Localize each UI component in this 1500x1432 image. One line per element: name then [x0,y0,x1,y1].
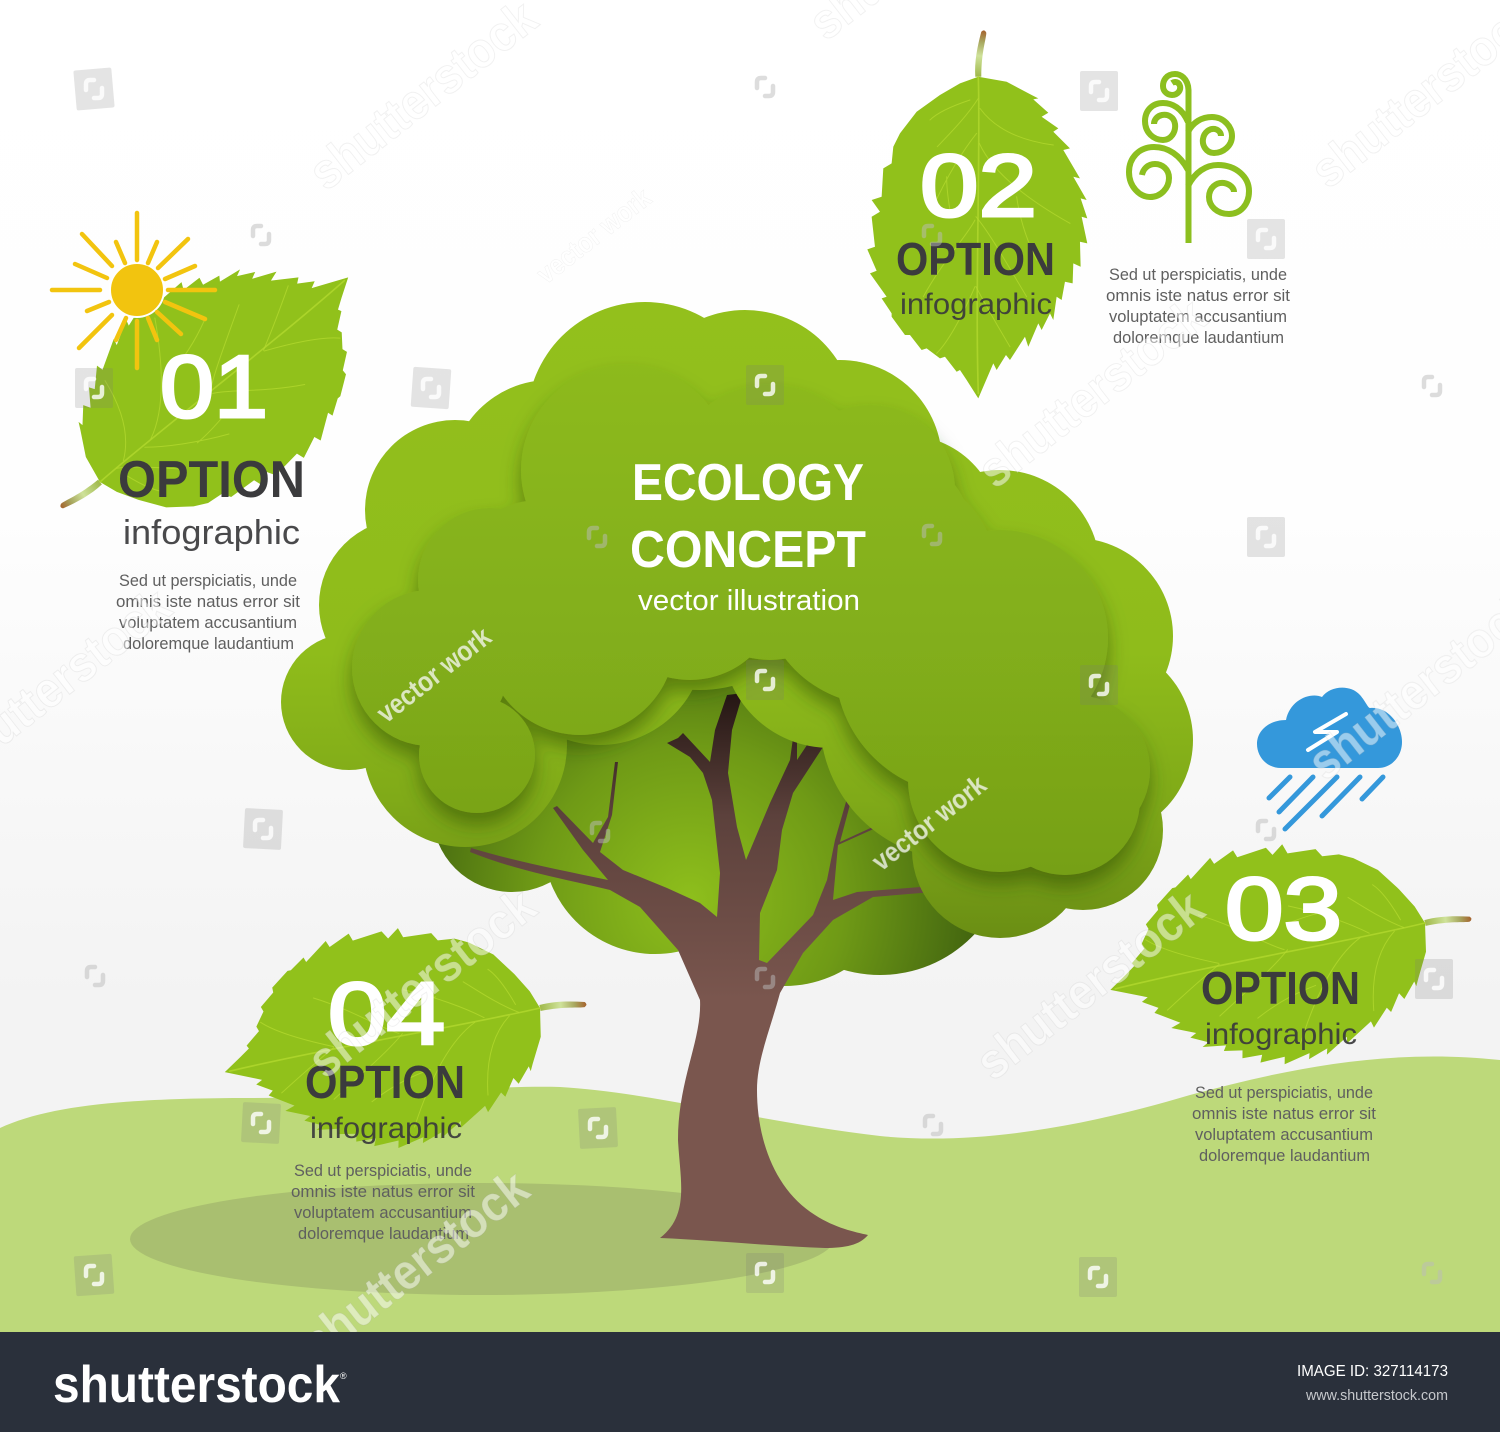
description 04: Sed ut perspiciatis, unde [294,1162,472,1180]
crown outer layer [281,302,1193,938]
description 04: omnis iste natus error sit [291,1183,475,1201]
option label 02: OPTION [896,233,1055,285]
ground hill [0,1056,1500,1332]
watermark text: vector work [371,620,497,729]
option 01 [0,193,419,653]
option 02 [867,30,1290,398]
description 03: doloremque laudantium [1199,1147,1370,1165]
tree shadow [130,1183,834,1295]
website: www.shutterstock.com [1305,1388,1448,1404]
watermark badges [73,67,1453,1297]
option label 04: OPTION [305,1056,465,1108]
tree title: ecology concept: CONCEPT [630,521,866,579]
footer bar [0,1332,1500,1432]
icon: sun [52,213,215,368]
leaf 02 [867,30,1087,398]
description 02 [1106,266,1290,347]
description 01: doloremque laudantium [123,635,294,653]
description 04: voluptatem accusantium [294,1204,472,1222]
description 02: omnis iste natus error sit [1106,287,1290,305]
crown back layer [432,640,1010,986]
description 04 [291,1162,475,1243]
watermark text: shutterstock [297,877,546,1089]
description 01: Sed ut perspiciatis, unde [119,572,297,590]
watermark text: shutterstock [965,879,1214,1091]
number 03: 03 [1225,859,1342,958]
description 01: omnis iste natus error sit [116,593,300,611]
watermark text: vector work [531,181,657,290]
description 03: voluptatem accusantium [1195,1126,1373,1144]
number 01: 01 [160,337,268,436]
number 04: 04 [328,964,445,1063]
infographic label 03: infographic [1205,1018,1357,1051]
registered mark: ® [340,1371,347,1381]
leaf 03 [1087,805,1493,1096]
icon: rain cloud [1257,688,1402,829]
option label 01: OPTION [118,451,305,509]
description 01 [116,572,300,653]
trunk and branches [470,693,933,1248]
tree title: ecology concept: ECOLOGY [632,454,864,512]
tree [281,302,1193,1248]
option 04 [203,890,607,1243]
number 02: 02 [920,136,1037,235]
icon: spiral tree [1129,74,1249,243]
infographic label 02: infographic [900,288,1052,321]
description 03: Sed ut perspiciatis, unde [1195,1084,1373,1102]
tree title: ecology concept: vector illustration [638,585,860,617]
leaf 01 [0,193,419,597]
infographic label 01: infographic [123,514,300,552]
tree title: ecology concept [630,454,866,617]
crown front layer [352,365,1150,875]
image id: IMAGE ID: 327114173 [1297,1363,1448,1380]
footer logo: shutterstock [53,1356,340,1414]
description 02: Sed ut perspiciatis, unde [1109,266,1287,284]
description 02: doloremque laudantium [1113,329,1284,347]
watermark text: shutterstock [967,287,1216,499]
option label 03: OPTION [1201,962,1360,1014]
description 01: voluptatem accusantium [119,614,297,632]
watermark text: vector work [866,768,992,877]
description 02: voluptatem accusantium [1109,308,1287,326]
leaf 04 [203,890,607,1179]
option 03 [1087,805,1493,1165]
description 04: doloremque laudantium [298,1225,469,1243]
description 03 [1192,1084,1376,1165]
description 03: omnis iste natus error sit [1192,1105,1376,1123]
watermark text: shutterstock [290,1159,539,1371]
infographic label 04: infographic [310,1112,462,1145]
